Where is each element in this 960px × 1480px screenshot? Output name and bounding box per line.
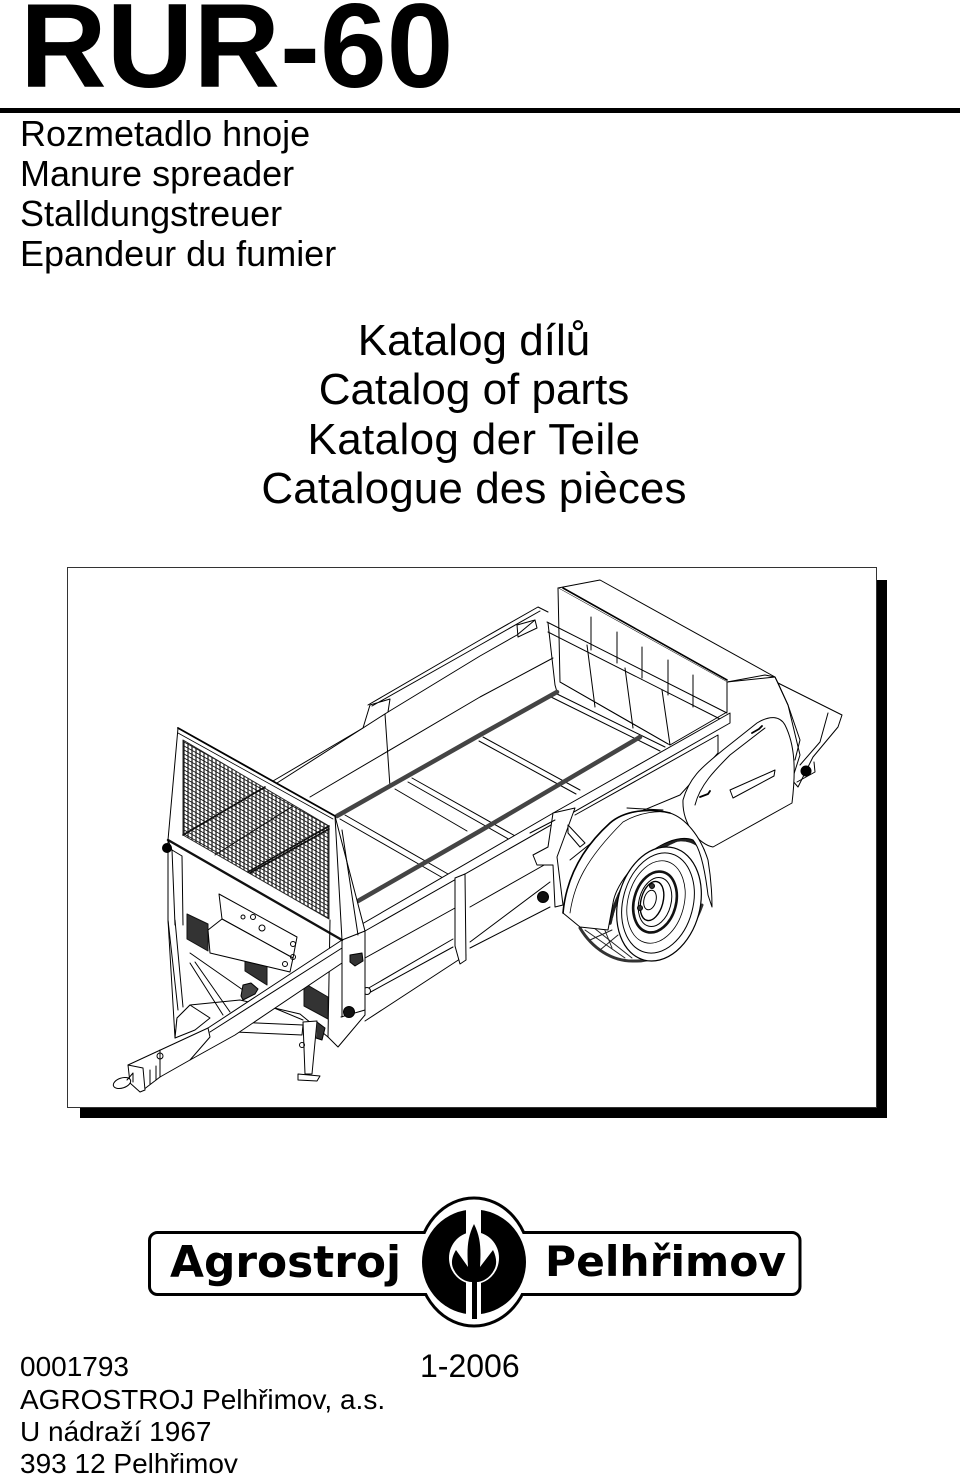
product names: Stalldungstreuer xyxy=(20,193,282,234)
rear spreader guard xyxy=(775,677,842,787)
product names xyxy=(20,113,336,274)
catalog headings xyxy=(261,316,687,513)
louvers xyxy=(187,914,328,1019)
side rail and panel xyxy=(362,713,730,1021)
wheel tread xyxy=(580,840,703,961)
product names: Epandeur du fumier xyxy=(20,233,336,274)
logo oval outline xyxy=(418,1198,530,1326)
rear hopper box xyxy=(547,580,830,745)
company address: U nádraží 1967 xyxy=(20,1416,211,1447)
support jack xyxy=(298,1021,325,1081)
catalog headings: Katalog dílů xyxy=(358,316,590,365)
catalog headings: Catalogue des pièces xyxy=(261,464,687,513)
company address: 393 12 Pelhřimov xyxy=(20,1448,238,1479)
catalog headings: Catalog of parts xyxy=(319,365,629,414)
document number: 0001793 xyxy=(20,1351,129,1382)
illustration frame xyxy=(67,567,877,1108)
logo text: Pelhřimov: Pelhřimov xyxy=(545,1237,786,1286)
far wall rails xyxy=(273,607,553,797)
product names: Rozmetadlo hnoje xyxy=(20,113,310,154)
floor cross bars xyxy=(340,693,665,878)
drawbar and hitch xyxy=(112,940,342,1092)
floor conveyor chains xyxy=(337,692,640,901)
logo emblem xyxy=(422,1205,526,1320)
logo text: Agrostroj: Agrostroj xyxy=(170,1237,401,1288)
company address: AGROSTROJ Pelhřimov, a.s. xyxy=(20,1384,385,1415)
date: 1-2006 xyxy=(420,1348,520,1384)
front panel xyxy=(162,728,365,1047)
company address xyxy=(20,1384,385,1479)
illustration frame shadow xyxy=(80,580,887,1118)
wheel xyxy=(604,837,714,971)
catalog headings: Katalog der Teile xyxy=(308,415,640,464)
drive cover xyxy=(683,718,794,847)
logo bar xyxy=(150,1232,800,1294)
title rule xyxy=(0,108,960,113)
fender xyxy=(563,808,712,930)
wheel bracket xyxy=(530,808,585,907)
product names: Manure spreader xyxy=(20,153,294,194)
